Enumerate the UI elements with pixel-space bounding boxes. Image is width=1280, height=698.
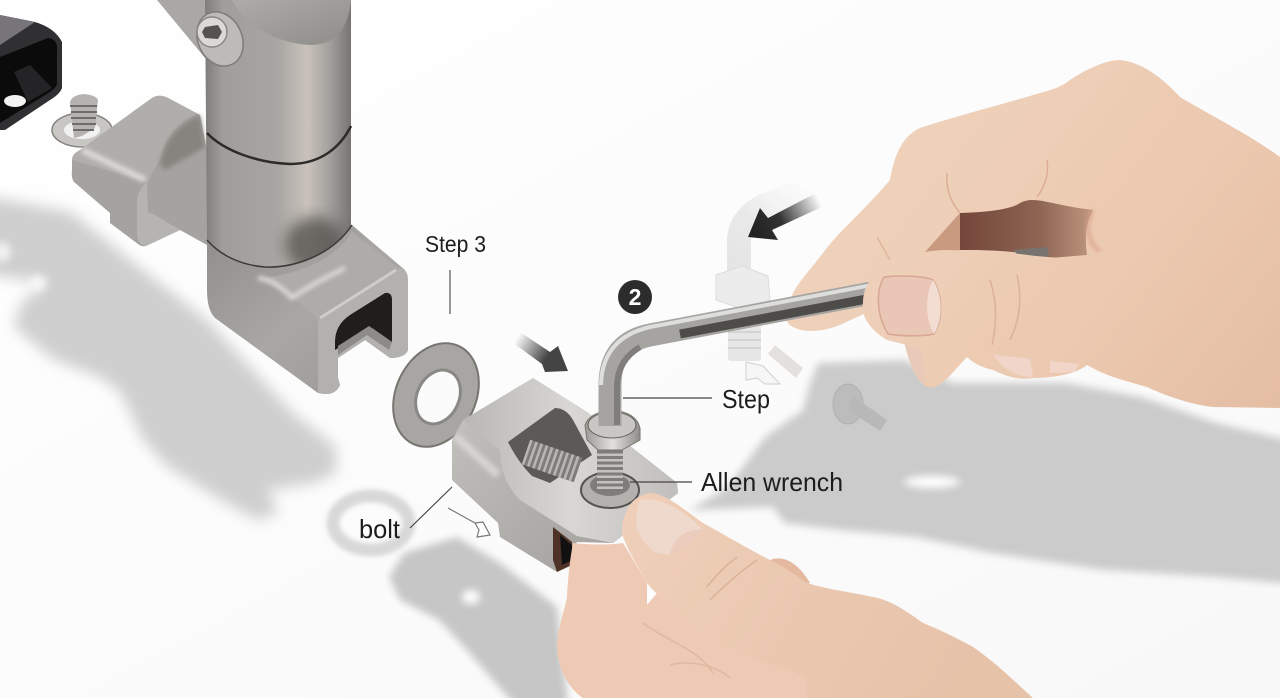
step number badge	[618, 280, 652, 314]
label: bolt: bolt	[359, 514, 401, 544]
faded exploded parts	[716, 188, 810, 384]
label: Step 3: Step 3	[425, 231, 486, 257]
black bracket	[0, 15, 62, 130]
lower bracket	[452, 378, 678, 572]
bolt and nuts	[581, 410, 640, 508]
washer	[377, 329, 495, 461]
allen wrench	[601, 247, 1050, 426]
motion arrow: small outline	[448, 508, 490, 537]
shadow highlights	[0, 242, 960, 604]
right hand	[787, 60, 1280, 408]
motion arrow: toward bracket	[512, 332, 568, 372]
label: Step 3	[425, 231, 486, 314]
faded screw	[833, 384, 887, 431]
right thumb	[862, 246, 1180, 368]
upper bracket foot	[207, 225, 408, 394]
label: Allen wrench: Allen wrench	[701, 467, 843, 497]
bottom hand	[557, 493, 1033, 698]
upper bracket left arm	[72, 96, 207, 246]
cast shadows	[0, 195, 1280, 698]
metal column	[157, 0, 351, 273]
label: Step: Step	[722, 384, 770, 414]
motion arrow: upper right	[748, 192, 824, 240]
step number badge: 2	[629, 284, 641, 310]
label: bolt	[359, 487, 452, 544]
small bolt	[52, 94, 112, 147]
